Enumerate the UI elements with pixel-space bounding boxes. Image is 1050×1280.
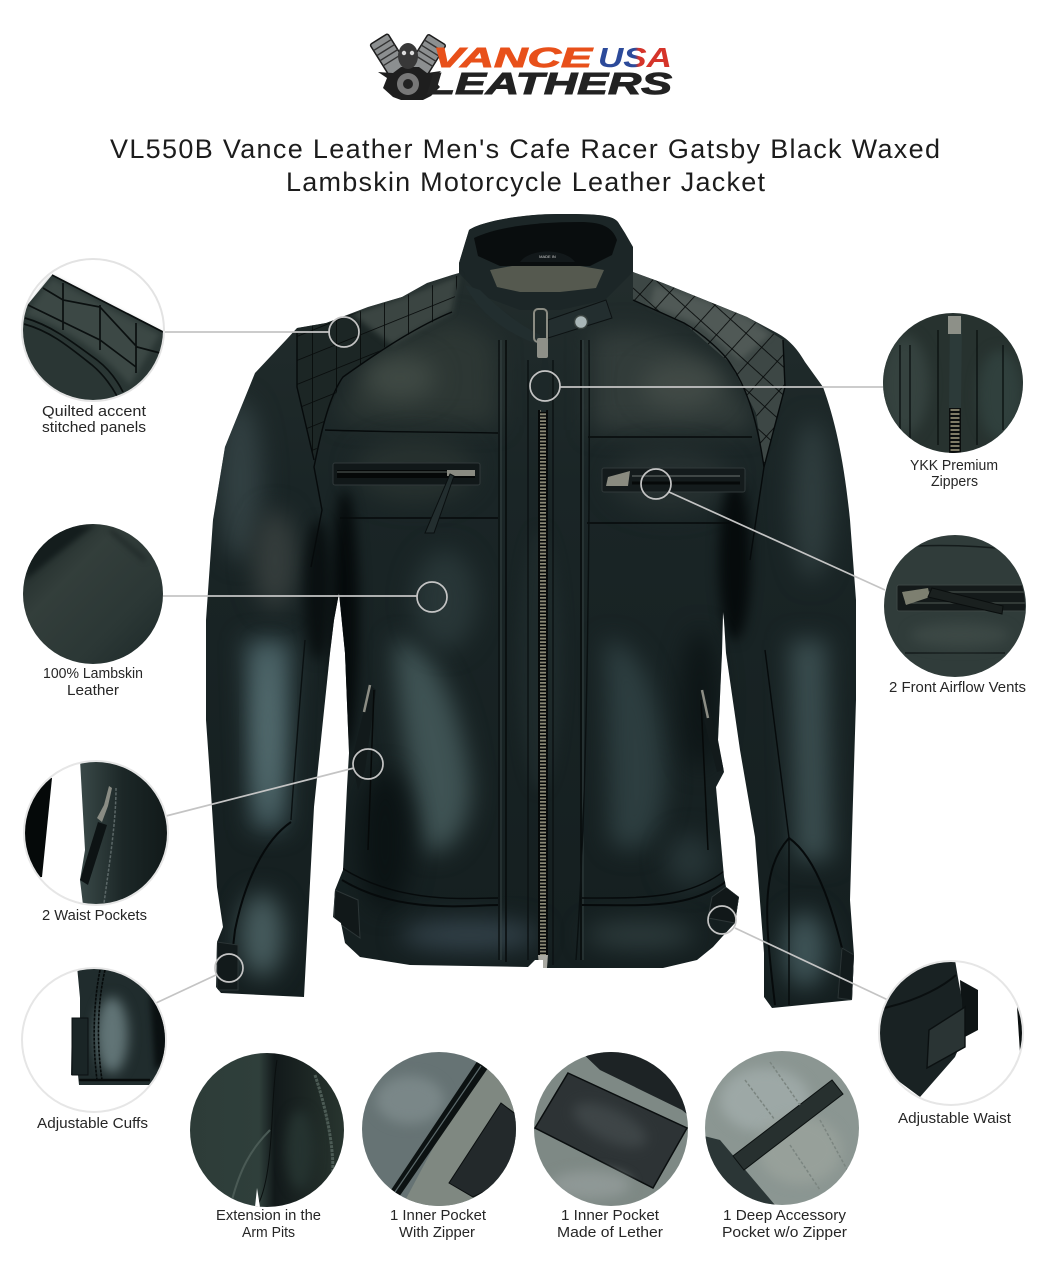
panel: YKK premium zippers	[881, 313, 1023, 490]
caption: 1 Deep Accessory	[723, 1208, 847, 1224]
caption: Quilted accent	[42, 404, 146, 420]
panel: quilted accent stitched panels	[15, 259, 170, 436]
leather highlights and shadows	[218, 320, 832, 988]
caption: Adjustable Cuffs	[37, 1116, 148, 1132]
callout: airflow vent marker and leader	[641, 469, 885, 590]
detail ellipse: zippered lining	[362, 1052, 516, 1206]
panel: adjustable cuffs	[22, 966, 170, 1132]
caption: Extension in the	[216, 1208, 321, 1224]
callout: zipper marker and leader	[530, 371, 883, 401]
detail circle: vent zipper	[884, 535, 1032, 677]
panel: adjustable waist	[870, 960, 1025, 1127]
title	[110, 134, 940, 197]
callout: cuff marker and leader	[156, 954, 243, 1003]
brand word: LEATHERS: LEATHERS	[427, 66, 672, 101]
panel: 1 inner pocket made of leather	[534, 1052, 688, 1237]
seams and stitching	[228, 300, 845, 1005]
right waist pocket	[701, 688, 724, 850]
detail circle: zipper teeth	[881, 313, 1023, 455]
left chest pocket	[333, 463, 480, 533]
caption: Zippers	[931, 474, 978, 490]
panel: 100% lambskin leather	[23, 524, 163, 699]
callout: quilted panel marker and leader	[163, 317, 359, 347]
caption	[390, 1208, 486, 1241]
detail circle: waist strap	[870, 960, 1025, 1105]
caption: Leather	[67, 683, 119, 699]
brand word: VANCE: VANCE	[433, 42, 594, 73]
panel: 1 deep accessory pocket without zipper	[700, 1050, 860, 1241]
callout: lambskin marker and leader	[163, 582, 447, 612]
callout: waist pocket marker and leader	[166, 749, 383, 816]
callout: waist strap marker and leader	[708, 906, 888, 1000]
hem belt tabs	[334, 887, 739, 938]
detail circle: leather texture	[23, 524, 163, 664]
detail circle: waist pocket zipper	[20, 760, 175, 905]
detail ellipse: leather pocket on lining	[534, 1050, 700, 1206]
caption: 2 Waist Pockets	[42, 908, 147, 924]
caption: Made of Lether	[557, 1225, 663, 1241]
panel: extension in the arm pits	[190, 1053, 344, 1241]
logo: Vance Leathers USA	[370, 34, 672, 101]
caption: 2 Front Airflow Vents	[889, 680, 1026, 696]
panel: 2 waist pockets	[20, 760, 175, 924]
main front zipper	[537, 338, 548, 968]
caption: Pocket w/o Zipper	[722, 1225, 847, 1241]
caption: With Zipper	[399, 1225, 475, 1241]
caption: Adjustable Waist	[898, 1111, 1011, 1127]
caption	[216, 1208, 321, 1241]
left waist pocket	[362, 684, 376, 850]
caption: stitched panels	[42, 420, 146, 436]
icon: V-twin engine with skull	[370, 34, 446, 100]
caption	[557, 1208, 663, 1241]
caption: Arm Pits	[242, 1225, 295, 1241]
detail ellipse: arm pit gusset	[190, 1053, 344, 1207]
brand word: USA: USA	[598, 42, 672, 73]
panel: 2 front airflow vents	[884, 535, 1032, 696]
right chest pocket	[602, 468, 745, 492]
caption: YKK Premium	[910, 458, 998, 474]
collar: MADE IN	[539, 254, 556, 259]
collar	[459, 214, 633, 345]
jacket illustration	[190, 200, 870, 1020]
detail ellipse: accessory pocket slit	[700, 1050, 860, 1205]
caption: 100% Lambskin	[43, 666, 143, 682]
title: VL550B Vance Leather Men's Cafe Racer Gatsby Black Waxed	[110, 134, 940, 164]
caption	[43, 666, 143, 699]
caption	[42, 404, 146, 436]
cuff straps	[217, 942, 854, 1000]
caption	[910, 458, 998, 490]
caption: 1 Inner Pocket	[390, 1208, 486, 1224]
detail circle: quilted stitching	[21, 258, 165, 402]
quilted shoulder panels	[297, 272, 785, 467]
detail circle: cuff strap	[22, 966, 170, 1112]
panel: 1 inner pocket with zipper	[362, 1052, 530, 1241]
caption: 1 Inner Pocket	[561, 1208, 659, 1224]
caption	[722, 1208, 847, 1241]
title: Lambskin Motorcycle Leather Jacket	[286, 167, 765, 197]
